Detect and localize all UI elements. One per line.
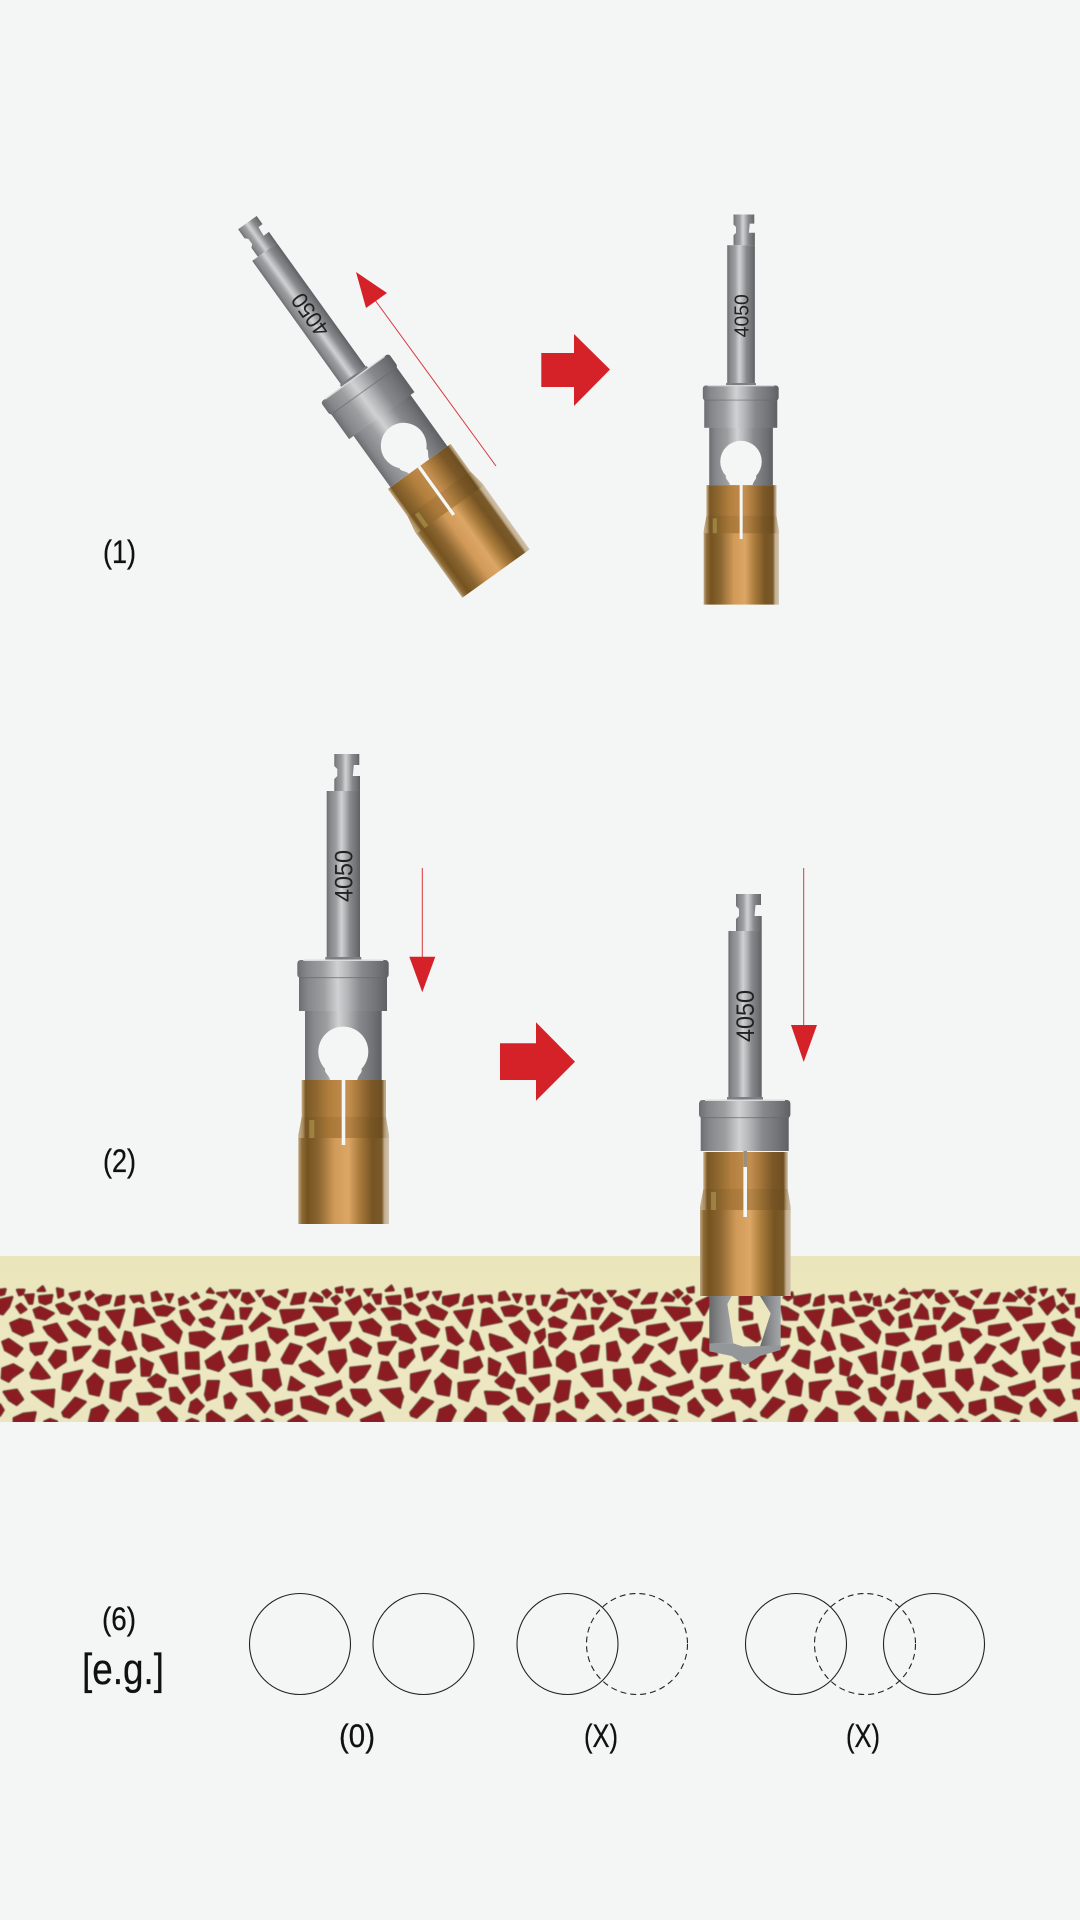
- bone cross-section: [0, 1256, 1080, 1422]
- thin red arrow: pull up along tilt: [356, 272, 496, 466]
- thin red arrow: down left: [409, 868, 435, 992]
- stopper body and sleeve: 4050: [732, 990, 760, 1042]
- tool inserted into bone: [699, 894, 791, 1365]
- tilted depth stopper tool: [211, 200, 530, 598]
- stopper body and sleeve: [699, 894, 791, 1296]
- step 6 label: (6): [102, 1601, 136, 1637]
- step 2 label: (2): [103, 1143, 136, 1179]
- big red arrow row 2: [500, 1022, 575, 1101]
- label O: (0): [339, 1718, 375, 1754]
- e.g. label: [e.g.]: [82, 1645, 164, 1694]
- thin red arrow: down right: [791, 868, 817, 1062]
- label X first: (X): [584, 1718, 618, 1754]
- drill tip in bone: [709, 1296, 781, 1365]
- label X second: (X): [846, 1718, 880, 1754]
- upright assembled tool row 1: 4050: [730, 294, 753, 337]
- example: separated circles correct: [250, 1594, 474, 1694]
- tool above bone row 2: 4050: [330, 850, 358, 902]
- big red arrow row 1: [541, 334, 610, 406]
- tool above bone row 2: [297, 754, 389, 1224]
- step 1 label: (1): [103, 534, 136, 570]
- example: one overlap incorrect: [517, 1594, 688, 1694]
- example: two overlaps incorrect: [746, 1594, 984, 1694]
- tilted depth stopper tool: 4050: [286, 288, 335, 342]
- upright assembled tool row 1: [703, 214, 779, 605]
